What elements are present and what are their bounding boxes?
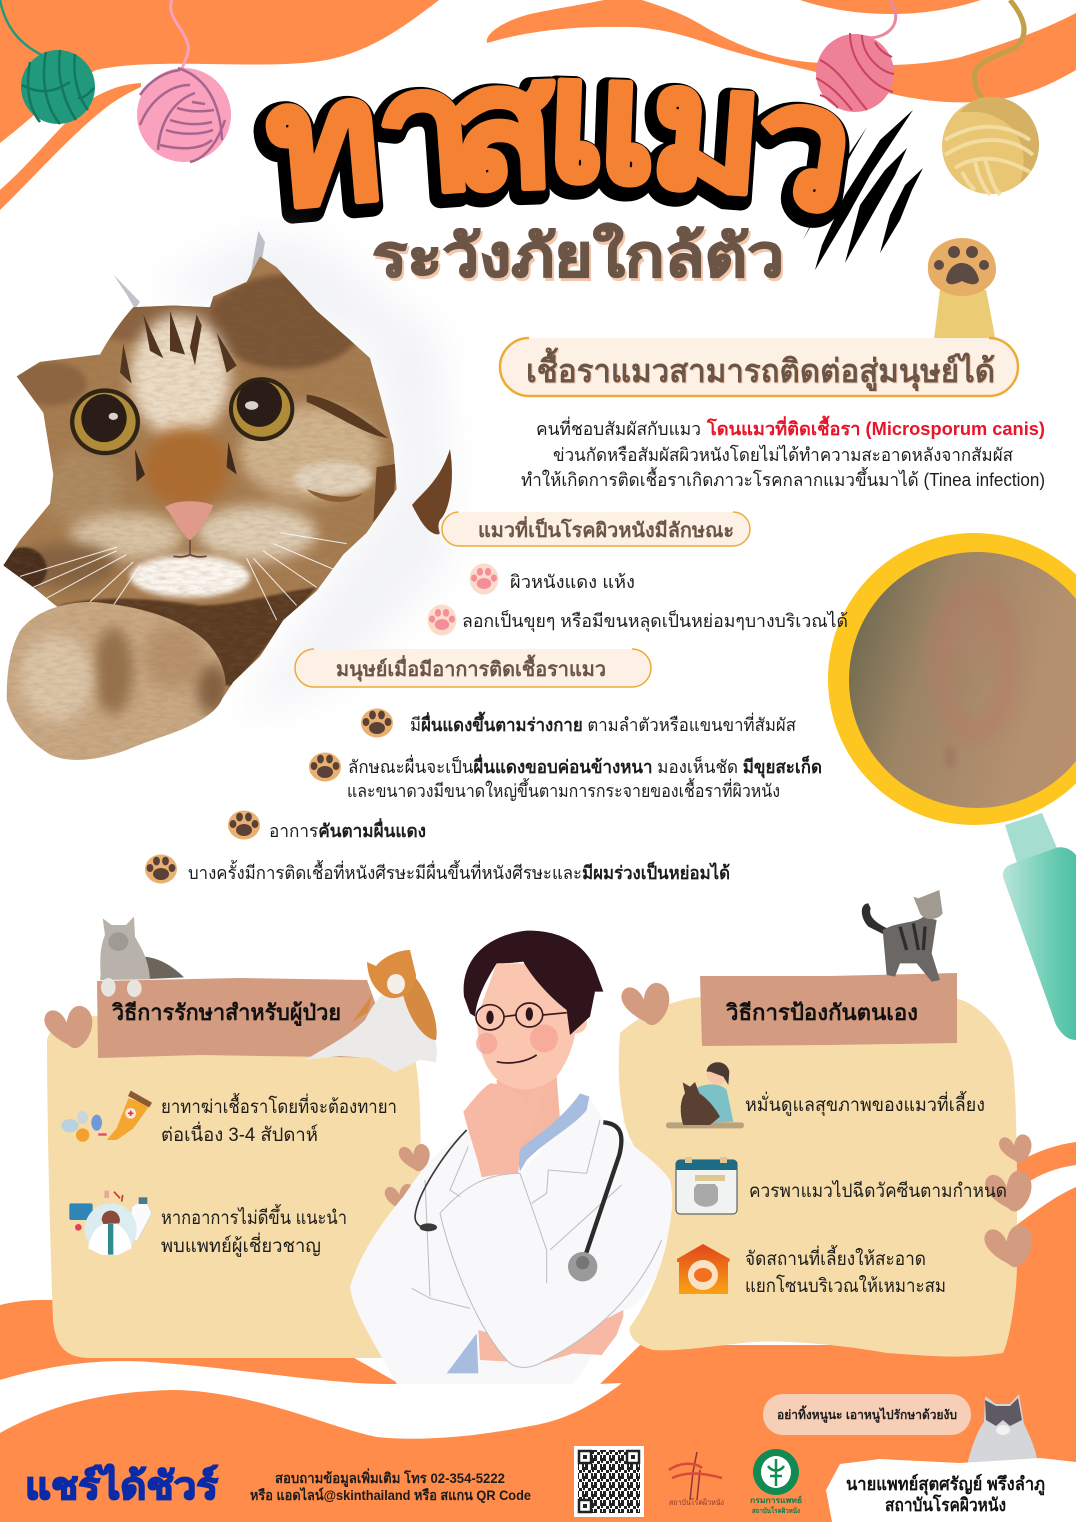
list: human symptoms: ลักษณะผื่นจะเป็นผื่นแดงขอบค่อนข้างหนา มองเห็นชัด มีขุยสะเก็ด — [348, 754, 822, 779]
text: treatment two — [161, 1204, 347, 1257]
list: cat symptoms: ลอกเป็นขุยๆ หรือมีขนหลุดเป็นหย่อมๆบางบริเวณได้ — [462, 609, 848, 632]
yarn ball: salmon — [816, 0, 896, 112]
icon: hearts right side — [984, 1134, 1032, 1267]
cat eye right — [229, 377, 294, 441]
text: prevention three — [745, 1245, 946, 1297]
cat nose — [165, 501, 213, 540]
text: treatment one: ยาทาฆ่าเชื้อราโดยที่จะต้องทายา — [161, 1093, 397, 1118]
skin photo in lens — [849, 551, 1076, 809]
icon: brown paw four — [145, 854, 177, 884]
text: prevention one: หมั่นดูแลสุขภาพของแมวที่เลี้ยง — [745, 1091, 985, 1117]
icon: hearts beside doctor — [385, 1144, 430, 1211]
text: treatment two: หากอาการไม่ดีขึ้น แนะนำ — [161, 1204, 347, 1229]
footer: author plate — [826, 1458, 1076, 1522]
footer: department logo: กรมการแพทย์ — [750, 1495, 802, 1505]
icon: pink paw — [470, 564, 498, 594]
face — [477, 963, 587, 1089]
icon: heart left — [44, 1006, 92, 1048]
lower hand — [478, 1310, 623, 1363]
cat fur scrap — [412, 449, 452, 534]
folded arm sleeve — [440, 1173, 662, 1367]
cat eye left — [70, 388, 140, 455]
icon: medicine — [61, 1091, 152, 1142]
heading bar — [97, 978, 395, 1058]
icon: heart right — [621, 983, 669, 1025]
list: human symptoms: และขนาดวงมีขนาดใหญ่ขึ้นตามการกระจายของเชื้อราที่ผิวหนัง — [347, 778, 780, 801]
text block: intro paragraph: ข่วนกัดหรือสัมผัสผิวหนังโดยไม่ได้ทำความสะอาดหลังจากสัมผัส — [553, 444, 1013, 465]
coat — [350, 1095, 672, 1384]
footer: institute logo: สถาบันโรคผิวหนัง — [669, 1497, 724, 1507]
panel: prevention — [619, 890, 1032, 1357]
heading text: วิธีการรักษาสำหรับผู้ป่วย — [111, 1000, 341, 1027]
cheeks — [476, 1024, 558, 1054]
magnifier with skin lesion — [828, 533, 1076, 1040]
icon: cat house — [677, 1244, 730, 1294]
background: white wave band at the bottom — [0, 1361, 622, 1439]
stethoscope — [585, 1122, 621, 1257]
text: treatment one — [161, 1093, 397, 1146]
whiskers — [20, 533, 347, 620]
list: cat symptoms: ผิวหนังแดง แห้ง — [510, 572, 635, 592]
footer: department logo: สถาบันโรคผิวหนัง — [752, 1506, 800, 1515]
footer: institute logo — [669, 1452, 724, 1507]
panel: cat symptoms heading — [442, 512, 750, 546]
glasses and face details — [476, 1003, 567, 1063]
title: ทาสแมว: ทาสแมว — [256, 31, 861, 254]
panel: cat symptoms heading: แมวที่เป็นโรคผิวหนังมีลักษณะ — [478, 515, 734, 542]
icon: brown paw three — [228, 810, 260, 840]
footer: department logo — [750, 1449, 802, 1515]
coat collar and arm lines — [412, 1120, 662, 1367]
panel: intro heading pill: เชื้อราแมวสามารถติดต่อสู่มนุษย์ได้ — [526, 347, 995, 392]
text block: intro paragraph: ทำให้เกิดการติดเชื้อราเกิดภาวะโรคกลากแมวขึ้นมาได้ (Tinea infection) — [521, 467, 1045, 490]
text block: intro paragraph — [521, 415, 1045, 490]
title: ทาสแมว: ทาสแมว — [260, 25, 865, 248]
text: prevention two: ควรพาแมวไปฉีดวัคซีนตามกำหนด — [749, 1180, 1007, 1202]
icon: brown paw two — [309, 752, 341, 782]
footer: author plate: นายแพทย์สุตศรัญย์ พรึงลำภู — [846, 1473, 1045, 1496]
torn paper flecks — [113, 231, 265, 309]
heading text: วิธีการป้องกันตนเอง — [725, 1000, 918, 1025]
list: human symptoms: อาการคันตามผื่นแดง — [269, 818, 426, 841]
yarn ball: green — [0, 0, 95, 124]
shirt — [517, 1093, 589, 1172]
footer: ragdoll cat — [967, 1394, 1038, 1472]
footer: contact: สอบถามข้อมูลเพิ่มเติม โทร 02-354-5222 — [275, 1468, 505, 1487]
icon: vet and cat — [666, 1062, 744, 1128]
cat: orange and white lying — [305, 950, 437, 1072]
footer: brand: แชร์ได้ชัวร์ — [25, 1464, 219, 1508]
panel: human symptoms heading — [295, 649, 651, 687]
paw raised on the right — [928, 238, 996, 338]
hair — [464, 931, 603, 1035]
heading bar — [700, 973, 957, 1046]
cat paw — [6, 602, 226, 760]
icon: vaccine calendar — [676, 1157, 737, 1214]
panel: intro heading pill — [500, 338, 1018, 396]
icon: brown paw one — [361, 708, 393, 738]
yarn ball: yellow — [942, 0, 1039, 195]
subtitle: ระวังภัยใกล้ตัว — [374, 225, 786, 292]
text: treatment two: พบแพทย์ผู้เชี่ยวชาญ — [161, 1232, 321, 1257]
text block: intro paragraph: คนที่ชอบสัมผัสกับแมว — [536, 416, 701, 439]
list: human symptoms: มีผื่นแดงขึ้นตามร่างกาย ตามลำตัวหรือแขนขาที่สัมผัส — [410, 711, 796, 735]
text: prevention three: แยกโซนบริเวณให้เหมาะสม — [745, 1274, 946, 1297]
text: treatment one: ต่อเนื่อง 3-4 สัปดาห์ — [161, 1121, 318, 1146]
cat: grey sitting — [100, 917, 184, 997]
claw scratches — [803, 110, 923, 270]
footer: contact — [250, 1468, 531, 1503]
torn paper shading — [150, 235, 450, 720]
panel: treatment — [44, 917, 437, 1358]
footer: contact: หรือ แอดไลน์@skinthailand หรือ สแกน QR Code — [250, 1486, 531, 1503]
cat head and body — [0, 231, 407, 765]
footer: speech pill: อย่าทิ้งหนูนะ เอาหนูไปรักษาด้วยงับ — [777, 1405, 957, 1423]
handle neck — [1005, 813, 1060, 872]
footer: author plate: สถาบันโรคผิวหนัง — [885, 1494, 1006, 1515]
doctor illustration — [350, 931, 672, 1384]
lower sleeve — [447, 1333, 478, 1373]
text: prevention three: จัดสถานที่เลี้ยงให้สะอาด — [745, 1245, 926, 1270]
footer: speech pill — [763, 1394, 971, 1435]
panel: intro heading pill: เชื้อราแมวสามารถติดต่อสู่มนุษย์ได้ — [527, 348, 996, 393]
list: human symptoms: บางครั้งมีการติดเชื้อที่หนังศีรษะมีผื่นขึ้นที่หนังศีรษะและมีผมร่วงเป็นหย่อมได้ — [188, 860, 730, 883]
neck — [497, 1077, 560, 1160]
panel: human symptoms heading: มนุษย์เมื่อมีอาการติดเชื้อราแมว — [336, 654, 606, 682]
subtitle: ระวังภัยใกล้ตัว — [372, 222, 784, 289]
icon: doctor consultation — [69, 1191, 152, 1255]
footer: QR code — [574, 1446, 644, 1517]
list: human symptoms — [145, 708, 822, 884]
icon: pink paw second — [428, 604, 456, 636]
list: cat symptoms — [428, 564, 848, 636]
thinking hand — [463, 1083, 544, 1177]
text block: intro paragraph: โดนแมวที่ติดเชื้อรา (Microsporum canis) — [706, 415, 1045, 439]
handle — [1003, 847, 1076, 1040]
yarn ball: pink — [137, 0, 231, 162]
cat: tabby kitten — [862, 890, 943, 982]
cat photo: cat peeking through torn paper — [0, 231, 452, 765]
yellow ring — [828, 533, 1076, 825]
